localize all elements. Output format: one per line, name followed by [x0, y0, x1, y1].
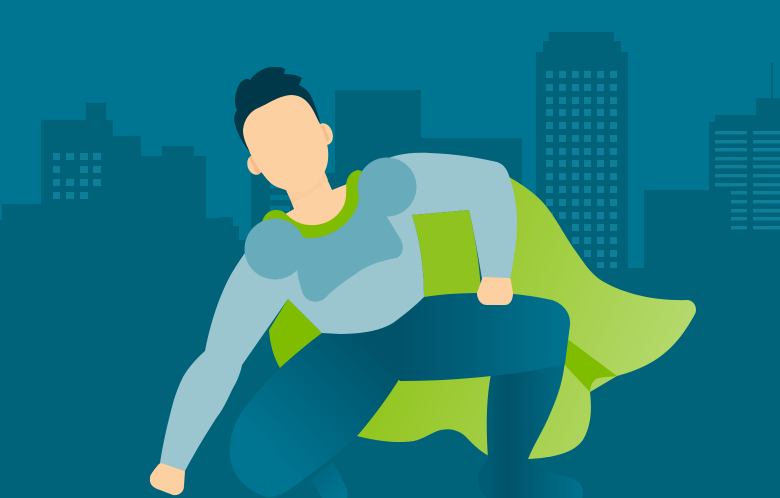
right building window stripes [715, 131, 780, 229]
neck shadow [283, 168, 328, 203]
cape: dark green fold [562, 338, 617, 392]
standing leg and foot [478, 360, 583, 498]
left shoulder [244, 218, 306, 280]
shirt: torso and arms [160, 153, 517, 471]
cape: lower left fold [269, 299, 323, 368]
cape: front lower part [357, 374, 495, 456]
left ear [245, 153, 265, 177]
back foot [311, 462, 348, 498]
hair [234, 67, 320, 155]
face [243, 95, 328, 193]
green torso panel between arm and body [412, 210, 481, 297]
centre building window stripes [270, 183, 290, 211]
neck [280, 170, 352, 235]
superhero figure [150, 67, 696, 498]
raised thigh [360, 292, 570, 381]
collar [262, 170, 362, 238]
right fist [477, 277, 513, 305]
cape: upper flowing part [480, 172, 696, 459]
right shoulder [358, 158, 416, 216]
right ear [314, 121, 336, 147]
bent leg lower section [230, 322, 420, 497]
chest shading [273, 190, 403, 302]
left building windows [53, 153, 101, 199]
left fist [150, 463, 185, 495]
tower windows [546, 71, 617, 268]
